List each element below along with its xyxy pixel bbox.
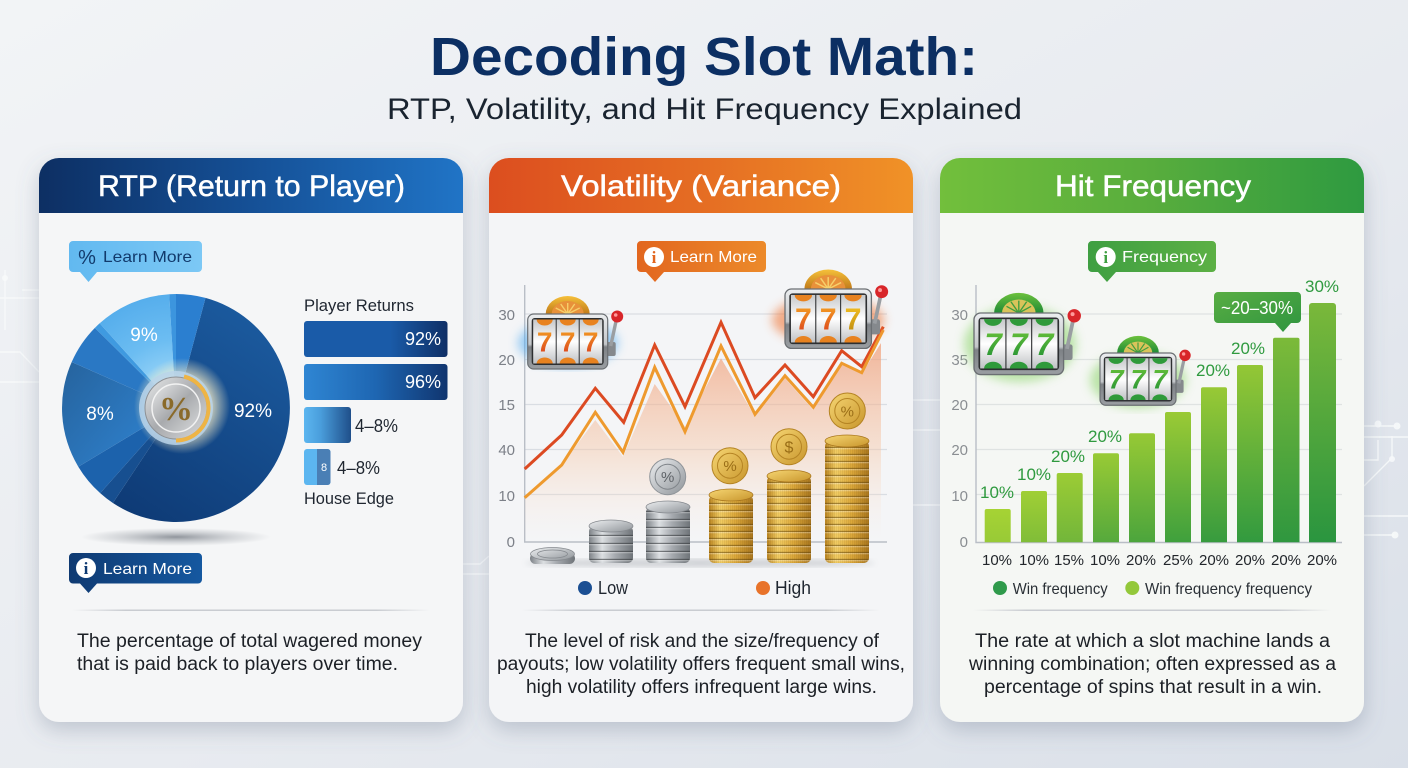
callout: volatility learn more (637, 241, 766, 282)
bar: 92% (304, 321, 448, 357)
description: RTP (77, 631, 422, 675)
y axis labels: 10 (951, 488, 968, 505)
y axis labels: 20 (951, 442, 968, 459)
icon: slot machine small: 7 (1152, 365, 1168, 395)
card background (489, 158, 913, 722)
subtitle: RTP, Volatility, and Hit Frequency Explained (387, 93, 1022, 126)
legend: win frequency frequency: Win frequency frequency (1145, 581, 1312, 598)
bar: 96% (304, 364, 448, 400)
stack: gold medium (767, 470, 811, 563)
callout: percent learn more (69, 241, 202, 282)
y axis labels: 30 (498, 307, 515, 324)
icon: slot machine low: 7 (537, 326, 552, 358)
description: hit frequency: The rate at which a slot machine lands a (975, 631, 1330, 652)
pie label: 9%: 9% (130, 325, 158, 346)
callout: frequency (1088, 241, 1216, 282)
coin: gold percent top (829, 393, 865, 429)
bar value labels: 20% (1231, 339, 1265, 358)
icon: slot machine low: 7 (583, 326, 598, 358)
legend: low (578, 578, 629, 598)
coin: silver percent: % (661, 469, 674, 486)
card background (940, 158, 1364, 722)
description: hit frequency: winning combination; often expressed as a (968, 654, 1336, 675)
y axis labels (951, 307, 968, 551)
line: low (525, 330, 883, 498)
bar: 92%: 92% (405, 329, 441, 349)
icon: slot machine large: 7 (1010, 327, 1029, 362)
x axis labels: 20% (1307, 552, 1337, 569)
y axis labels: 10 (498, 488, 515, 505)
stack: silver medium (646, 501, 690, 563)
y axis labels (498, 307, 515, 551)
coin: gold percent top: % (841, 404, 854, 420)
x axis labels: 25% (1163, 552, 1193, 569)
icon: slot machine high: 7 (820, 303, 837, 337)
icon: slot machine small: 7 (1131, 365, 1147, 395)
description: volatility: The level of risk and the size/frequency of (525, 631, 880, 652)
coin: gold percent (712, 448, 748, 484)
panel: Hit Frequency (940, 158, 1364, 722)
description: hit frequency: percentage of spins that result in a win. (984, 677, 1322, 698)
bar value labels: 30% (1305, 277, 1339, 296)
heading: RTP: RTP (Return to Player) (98, 170, 405, 203)
x axis labels: 15% (1054, 552, 1084, 569)
legend: high (756, 578, 811, 598)
callout: info learn more: i (84, 559, 89, 578)
pie chart (62, 294, 290, 522)
bar value labels: 20% (1088, 427, 1122, 446)
coin stacks (525, 435, 875, 567)
bar value labels: 10% (980, 483, 1014, 502)
coin: gold dollar: $ (785, 440, 794, 456)
icon: slot machine large (964, 293, 1081, 382)
callout: percent learn more: % (78, 247, 96, 269)
chart grid and axes (976, 285, 1342, 542)
description: volatility: payouts; low volatility offers frequent small wins, (497, 654, 905, 675)
pie label: 92%: 92% (234, 401, 272, 422)
bar: 4-8%: 4–8% (355, 416, 398, 436)
x axis labels: 20% (1271, 552, 1301, 569)
legend heading: player returns: Player Returns (304, 296, 414, 315)
callout: 20-30%: ~20–30% (1221, 298, 1293, 318)
bar: 4-8% (304, 407, 398, 443)
description: volatility (497, 631, 905, 698)
callout: frequency: Frequency (1122, 249, 1207, 266)
icon: slot machine high: 7 (845, 303, 861, 337)
coin: silver percent (650, 459, 686, 495)
bar value labels: 20% (1051, 447, 1085, 466)
pie shadow (81, 528, 271, 546)
callout: info learn more (69, 553, 202, 593)
callout: percent learn more: Learn More (103, 249, 192, 266)
icon: slot machine small (1090, 336, 1191, 408)
icon: slot machine high: 7 (795, 303, 812, 337)
stack: gold tall (825, 435, 869, 563)
heading: Volatility: Volatility (Variance) (561, 170, 841, 203)
x axis labels: 20% (1126, 552, 1156, 569)
y axis labels: 35 (951, 352, 968, 369)
coin: gold dollar (771, 429, 807, 465)
icon: slot machine large: 7 (984, 327, 1003, 362)
y axis labels: 20 (498, 352, 515, 369)
panel: RTP (39, 158, 463, 722)
bar: 4-8% small: 8 (321, 462, 327, 474)
y axis labels: 0 (960, 534, 968, 551)
x axis labels: 10% (1090, 552, 1120, 569)
chart grid and axes (525, 285, 887, 542)
bar: 96%: 96% (405, 372, 441, 392)
panel: Volatility (489, 158, 913, 722)
coin: gold percent: % (723, 458, 737, 475)
icon: slot machine large: 7 (1036, 327, 1055, 362)
legend: high: High (775, 578, 811, 598)
legend: win frequency: Win frequency (1013, 581, 1108, 598)
icon: slot machine low (518, 296, 623, 369)
callout: 20-30% (1214, 292, 1301, 332)
y axis labels: 40 (498, 442, 515, 459)
x axis labels: 20% (1199, 552, 1229, 569)
y axis labels: 15 (498, 397, 515, 414)
x axis labels (982, 552, 1337, 569)
y axis labels: 30 (951, 307, 968, 324)
heading: Hit Frequency: Hit Frequency (1055, 170, 1251, 203)
icon: percent coin: % (159, 391, 193, 428)
icon: slot machine small: 7 (1109, 365, 1125, 395)
legend heading: house edge: House Edge (304, 489, 394, 508)
stack: silver small (589, 520, 633, 563)
bar chart (951, 277, 1342, 569)
description: RTP: that is paid back to players over time. (77, 654, 398, 675)
x axis labels: 10% (982, 552, 1012, 569)
bar: 4-8% small (304, 449, 380, 485)
callout: frequency: i (1103, 248, 1108, 267)
pie label: 8%: 8% (86, 404, 114, 425)
x axis labels: 20% (1235, 552, 1265, 569)
callout: volatility learn more: i (652, 248, 657, 267)
line: high (525, 322, 883, 469)
heading: RTP (39, 158, 463, 213)
description: volatility: high volatility offers infrequent large wins. (526, 677, 877, 698)
coin: single silver (530, 548, 575, 564)
title: Decoding Slot Math: (430, 27, 978, 87)
bar value labels: 10% (1017, 465, 1051, 484)
y axis labels: 0 (507, 534, 515, 551)
callout: volatility learn more: Learn More (670, 249, 757, 266)
heading: Hit Frequency (940, 158, 1364, 213)
y axis labels: 20 (951, 397, 968, 414)
icon: percent coin (134, 358, 230, 454)
icon: slot machine high (772, 270, 888, 348)
heading: Volatility (489, 158, 913, 213)
icon: slot machine low: 7 (560, 326, 575, 358)
card background (39, 158, 463, 722)
area under line (525, 343, 881, 540)
bar: 4-8% small: 4–8% (337, 458, 380, 478)
bar value labels (980, 277, 1339, 502)
stack: gold small (709, 489, 753, 563)
x axis labels: 10% (1019, 552, 1049, 569)
line chart (498, 285, 887, 551)
bars (985, 303, 1336, 542)
bar value labels: 20% (1196, 361, 1230, 380)
description: RTP: The percentage of total wagered money (77, 631, 422, 652)
legend: low: Low (598, 578, 629, 598)
description: hit frequency (968, 631, 1336, 698)
callout: info learn more: Learn More (103, 561, 192, 578)
